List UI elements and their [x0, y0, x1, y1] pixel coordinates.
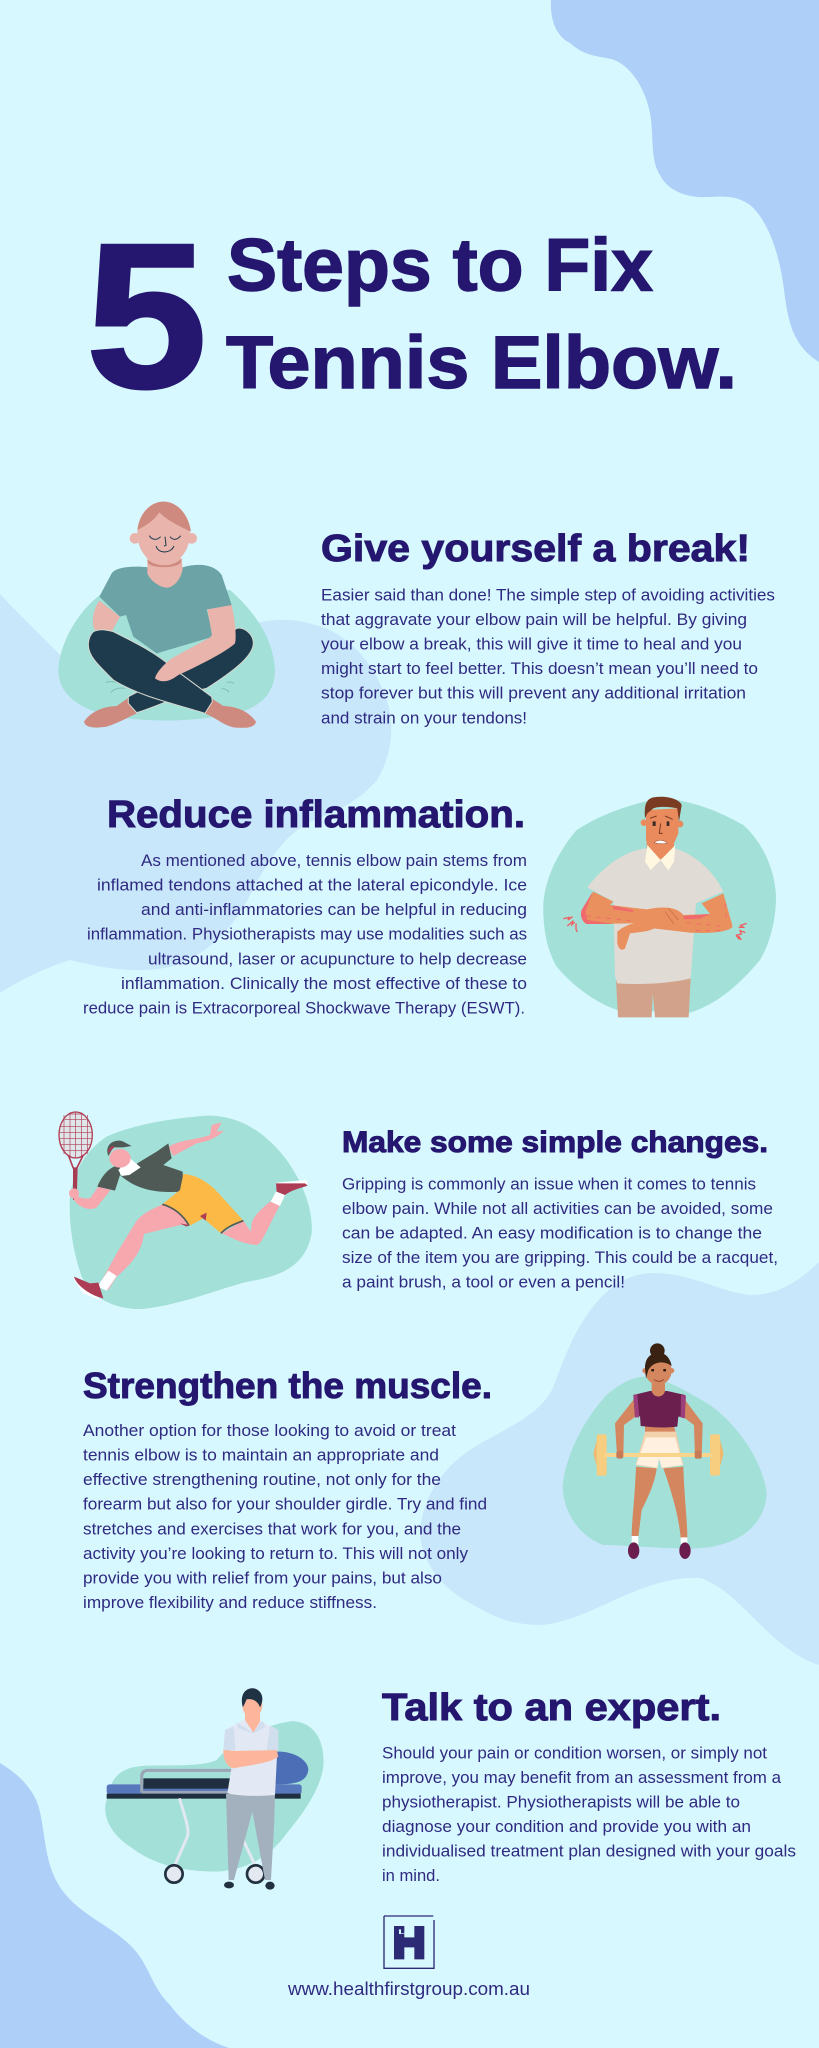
illustration: woman lifting barbell [563, 1343, 767, 1559]
legs [632, 1467, 657, 1537]
teal blob [543, 799, 776, 1013]
website url: www.healthfirstgroup.com.au [287, 1979, 530, 1999]
shoes [628, 1542, 639, 1559]
section: strengthen the muscle: forearm but also for your shoulder girdle. Try and find [83, 1495, 487, 1514]
section: reduce inflammation [83, 794, 527, 1017]
arms [647, 893, 733, 933]
background blob: top right [551, 0, 819, 362]
leading arm [168, 1122, 224, 1156]
teal blob [563, 1377, 767, 1548]
neck [147, 558, 183, 588]
front leg [98, 1204, 189, 1290]
teal blob [70, 1116, 312, 1309]
section: reduce inflammation: inflammation. Clinically the most effective of these to [121, 974, 527, 993]
body text: Should your pain or condition worsen, or simply not [382, 1743, 767, 1762]
body text: Gripping is commonly an issue when it comes to tennis [342, 1174, 756, 1193]
title line two: Tennis Elbow. [226, 321, 737, 404]
logo: Health First H mark [384, 1916, 434, 1968]
shorts [162, 1174, 243, 1233]
section: strengthen the muscle: improve flexibility and reduce stiffness. [83, 1593, 377, 1612]
heading: Reduce inflammation. [107, 794, 525, 836]
illustration: tennis player [59, 1112, 312, 1309]
section: strengthen the muscle: stretches and exercises that work for you, and the [83, 1519, 461, 1538]
hands [616, 1451, 623, 1459]
back leg [222, 1202, 280, 1245]
body text: Another option for those looking to avoid or treat [83, 1421, 456, 1440]
shorts [636, 1432, 683, 1468]
section: give yourself a break: your elbow a break, this will give it time to heal and you [321, 634, 742, 653]
racket [59, 1112, 92, 1200]
heading: Strengthen the muscle. [83, 1365, 492, 1406]
shirt [633, 1391, 685, 1428]
heading: Make some simple changes. [342, 1126, 768, 1159]
socks [632, 1536, 687, 1544]
trousers [226, 1794, 275, 1880]
barbell [593, 1434, 724, 1476]
feet [84, 697, 140, 728]
section: make some simple changes: a paint brush, a tool or even a pencil! [342, 1273, 625, 1292]
section: strengthen the muscle: activity you’re looking to return to. This will not only [83, 1544, 469, 1563]
section: give yourself a break: and strain on your tendons! [321, 708, 527, 727]
section: strengthen the muscle: tennis elbow is to maintain an appropriate and [83, 1446, 439, 1465]
section: make some simple changes: size of the item you are gripping. This could be a racquet, [342, 1248, 778, 1267]
teal blob [105, 1721, 324, 1872]
section: talk to an expert: physiotherapist. Physiotherapists will be able to [382, 1792, 740, 1811]
right arm [155, 605, 236, 681]
folded arms [223, 1750, 278, 1768]
section: make some simple changes: can be adapted. An easy modification is to change the [342, 1223, 762, 1242]
shoes [224, 1882, 234, 1888]
background blob: bottom left [0, 1763, 229, 2048]
section: talk to an expert: in mind. [382, 1866, 440, 1885]
head [130, 533, 140, 544]
heading: Talk to an expert. [382, 1687, 721, 1729]
heading: Give yourself a break! [321, 528, 750, 570]
body text: Easier said than done! The simple step of avoiding activities [321, 586, 775, 605]
section: make some simple changes: elbow pain. While not all activities can be avoided, some [342, 1199, 773, 1218]
collar [118, 1158, 141, 1176]
section: strengthen the muscle: provide you with relief from your pains, but also [83, 1568, 442, 1587]
arms [615, 1400, 640, 1458]
title number 5: 5 [86, 201, 207, 431]
section: talk to an expert [382, 1687, 796, 1885]
title [86, 201, 737, 431]
collar [645, 845, 675, 871]
shoes [72, 1277, 102, 1301]
left arm [93, 601, 120, 633]
section: strengthen the muscle [83, 1365, 492, 1612]
section: reduce inflammation: reduce pain is Extracorporeal Shockwave Therapy (ESWT). [83, 998, 525, 1017]
pain marks [563, 917, 747, 940]
section: give yourself a break: might start to feel better. This doesn’t mean you’ll need to [321, 659, 758, 678]
background blob: middle left [0, 594, 391, 993]
head [641, 819, 647, 826]
section: strengthen the muscle: effective strengthening routine, not only for the [83, 1470, 441, 1489]
far arm [73, 1187, 111, 1209]
section: reduce inflammation: inflamed tendons attached at the lateral epicondyle. Ice [97, 876, 527, 895]
body text: As mentioned above, tennis elbow pain stems from [141, 851, 527, 870]
section: reduce inflammation: and anti-inflammatories can be helpful in reducing [141, 900, 527, 919]
shirt [587, 848, 723, 984]
head [642, 1368, 648, 1373]
shirt [97, 1143, 183, 1192]
section: give yourself a break: that aggravate your elbow pain will be helpful. By giving [321, 610, 747, 629]
trousers [616, 978, 691, 1017]
illustration: meditating man [58, 502, 275, 728]
illustration: man with sore arm [543, 797, 776, 1017]
title line one: Steps to Fix [227, 224, 653, 306]
illustration: physiotherapist and treatment bed [105, 1688, 324, 1890]
section: reduce inflammation: ultrasound, laser or acupuncture to help decrease [148, 949, 527, 968]
socks [97, 1271, 117, 1291]
neck and head [245, 1712, 260, 1733]
neck [652, 1383, 665, 1396]
shirt [99, 565, 232, 653]
section: give yourself a break [321, 528, 775, 727]
shirt [225, 1720, 278, 1796]
head [109, 1149, 131, 1168]
section: make some simple changes [342, 1126, 778, 1292]
section: reduce inflammation: inflammation. Physiotherapists may use modalities such as [87, 925, 527, 944]
section: talk to an expert: improve, you may benefit from an assessment from a [382, 1768, 782, 1787]
section: talk to an expert: diagnose your condition and provide you with an [382, 1817, 751, 1836]
neck [647, 837, 674, 860]
midriff [645, 1423, 676, 1434]
background blob: middle right [420, 1262, 819, 1665]
section: give yourself a break: stop forever but this will prevent any additional irritation [321, 684, 746, 703]
legs [128, 628, 253, 713]
bed [107, 1751, 308, 1883]
section: talk to an expert: individualised treatment plan designed with your goals [382, 1842, 796, 1861]
teal blob [58, 590, 275, 721]
